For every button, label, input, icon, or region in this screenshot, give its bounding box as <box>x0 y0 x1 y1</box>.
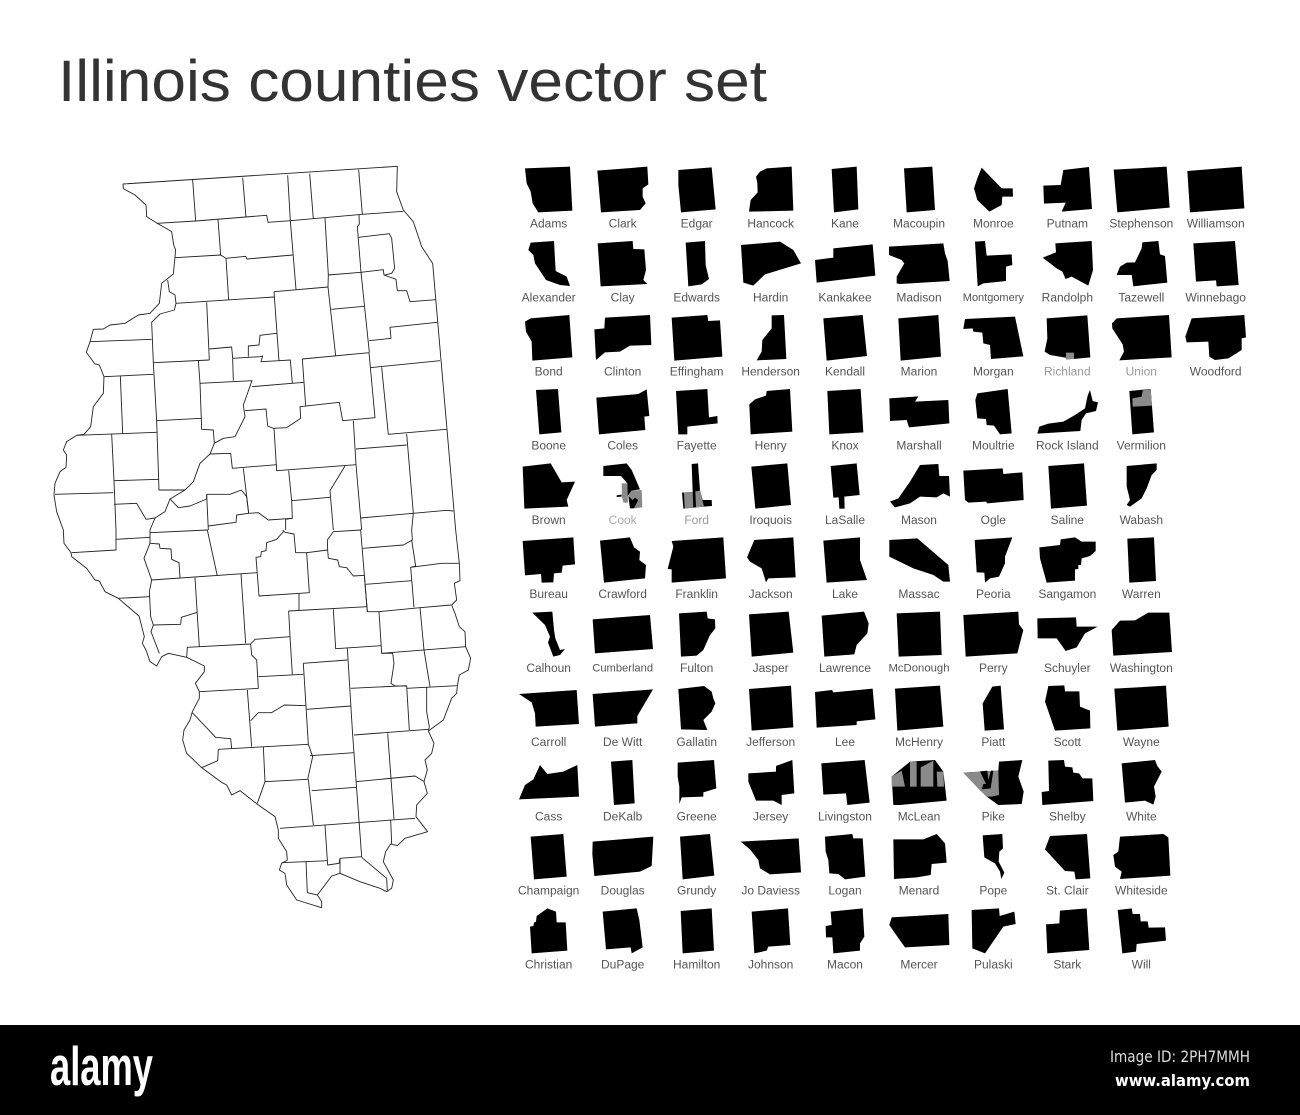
county: Hamilton: Hamilton <box>673 957 720 971</box>
county: Cook: Cook <box>609 513 638 527</box>
county: Mason <box>890 464 950 527</box>
county: McDonough <box>888 612 950 674</box>
county: Winnebago <box>1185 241 1246 305</box>
county: Saline: Saline <box>1051 513 1084 527</box>
county: Clark: Clark <box>609 217 638 231</box>
county: Warren: Warren <box>1122 587 1161 601</box>
county: Douglas: Douglas <box>601 883 645 897</box>
county: Edgar: Edgar <box>681 217 713 231</box>
county: Peoria <box>975 537 1012 601</box>
county: Richland <box>1044 315 1091 379</box>
county: Fulton <box>679 612 715 675</box>
county: Bond: Bond <box>535 365 563 379</box>
county: Marshall: Marshall <box>896 439 942 453</box>
county: Lee: Lee <box>835 735 855 749</box>
county: Moultrie <box>972 389 1015 453</box>
county: Union <box>1112 315 1172 379</box>
county: Iroquois <box>749 463 792 527</box>
county: Boone: Boone <box>531 439 566 453</box>
county: Mason: Mason <box>901 513 937 527</box>
county: Vermilion <box>1117 389 1166 453</box>
county: Hamilton <box>673 908 720 971</box>
county: Macon <box>826 908 864 971</box>
county: Ogle: Ogle <box>981 513 1006 527</box>
county: Livingston <box>818 760 872 823</box>
county: Champaign: Champaign <box>518 883 579 897</box>
county: Montgomery: Montgomery <box>963 292 1024 304</box>
county: LaSalle <box>825 463 865 527</box>
county: Jo Daviess <box>741 838 801 897</box>
county: Ford: Ford <box>684 513 709 527</box>
county: DuPage: DuPage <box>601 957 645 971</box>
county: Johnson <box>748 908 793 971</box>
county: DeKalb: DeKalb <box>603 809 643 823</box>
county: Pike: Pike <box>982 809 1005 823</box>
county: Monroe: Monroe <box>973 217 1014 231</box>
county: Macon: Macon <box>827 957 863 971</box>
county: Perry: Perry <box>979 661 1008 675</box>
county: Cumberland <box>592 615 653 674</box>
county: Grundy <box>677 834 716 897</box>
county: Montgomery <box>963 241 1024 304</box>
county: Piatt <box>981 686 1006 749</box>
county: Jackson <box>747 537 796 601</box>
county: Mercer: Mercer <box>900 957 938 971</box>
county: Shelby <box>1042 760 1093 823</box>
county: Pike <box>963 760 1024 823</box>
county: Gallatin: Gallatin <box>676 735 717 749</box>
county: Gallatin <box>676 686 717 749</box>
county: Mercer <box>889 914 949 971</box>
county: Franklin: Franklin <box>675 587 718 601</box>
county: Henderson: Henderson <box>741 365 800 379</box>
county: Jackson: Jackson <box>749 587 793 601</box>
county: Lake: Lake <box>832 587 858 601</box>
county: Clark <box>597 167 648 231</box>
county: Cass <box>519 765 579 823</box>
county: Boone <box>531 389 566 453</box>
county: Pope <box>979 834 1008 897</box>
county: Stephenson: Stephenson <box>1109 217 1173 231</box>
panel: county silhouettes grid <box>518 167 1246 971</box>
county: Fayette <box>676 389 718 453</box>
county: Edgar <box>678 167 716 231</box>
county: Madison <box>889 243 950 305</box>
county: Shelby: Shelby <box>1049 809 1086 823</box>
county: Coles <box>596 389 649 453</box>
county: Hancock <box>747 167 795 231</box>
county: Whiteside <box>1113 834 1170 897</box>
county: Menard <box>893 834 947 897</box>
county: McLean: McLean <box>898 809 940 823</box>
county: Woodford <box>1185 315 1246 379</box>
footer bar: alamy <box>0 1025 1300 1115</box>
county: Jersey: Jersey <box>753 809 788 823</box>
county: Stark: Stark <box>1053 957 1082 971</box>
county: Effingham: Effingham <box>670 365 724 379</box>
county: Randolph: Randolph <box>1042 291 1093 305</box>
county: Brown <box>523 463 575 527</box>
county: Coles: Coles <box>607 439 638 453</box>
county: St. Clair: St. Clair <box>1046 883 1089 897</box>
county: Johnson: Johnson <box>748 957 793 971</box>
county: Alexander: Alexander <box>522 291 576 305</box>
county: Washington: Washington <box>1110 661 1173 675</box>
county: Jo Daviess: Jo Daviess <box>741 883 800 897</box>
county: Hardin <box>741 242 801 305</box>
county: Macoupin <box>893 167 945 231</box>
county: Scott <box>1045 685 1090 749</box>
county: Sangamon: Sangamon <box>1038 587 1096 601</box>
county: Henry <box>749 389 792 453</box>
county: Fulton: Fulton <box>680 661 713 675</box>
county: Kankakee <box>815 244 875 305</box>
county: Cumberland: Cumberland <box>592 662 653 674</box>
county: Marion <box>898 315 941 379</box>
county: Adams: Adams <box>530 217 567 231</box>
county: Henderson <box>741 315 800 379</box>
county: Morgan <box>963 317 1023 379</box>
map: Illinois county outlines <box>54 166 471 908</box>
county: Jefferson <box>746 686 795 749</box>
county: Crawford: Crawford <box>598 587 647 601</box>
county: Kane: Kane <box>831 217 859 231</box>
county: Menard: Menard <box>899 883 939 897</box>
county: Whiteside: Whiteside <box>1115 883 1168 897</box>
county: Washington <box>1110 613 1173 675</box>
county: Clinton <box>594 315 651 379</box>
county: Champaign <box>518 834 579 897</box>
county: Franklin <box>668 537 726 601</box>
county: White: White <box>1126 809 1157 823</box>
county: Jasper <box>749 612 793 675</box>
county: Alexander <box>522 241 576 305</box>
county: McDonough: McDonough <box>888 662 950 674</box>
county: Pulaski: Pulaski <box>974 957 1013 971</box>
county: Christian <box>525 908 572 971</box>
county: Sangamon <box>1038 537 1096 601</box>
county: Clinton: Clinton <box>604 365 641 379</box>
county: Hardin: Hardin <box>753 291 788 305</box>
county: Iroquois: Iroquois <box>749 513 792 527</box>
county: Kane <box>831 167 859 231</box>
county: Crawford <box>598 537 647 601</box>
website: www.alamy.com <box>1115 1071 1250 1090</box>
county: Greene <box>677 760 717 823</box>
county: Union: Union <box>1126 365 1157 379</box>
county: Calhoun: Calhoun <box>526 661 571 675</box>
county: Cass: Cass <box>535 809 562 823</box>
county: Lake <box>823 537 867 601</box>
county: Stark <box>1046 908 1089 971</box>
county: Effingham <box>670 315 724 379</box>
county: De Witt: De Witt <box>603 735 643 749</box>
county: Livingston: Livingston <box>818 809 872 823</box>
county: Grundy: Grundy <box>677 883 716 897</box>
county: Williamson: Williamson <box>1187 217 1245 231</box>
county: Lawrence: Lawrence <box>819 661 871 675</box>
county: Putnam: Putnam <box>1047 217 1088 231</box>
county: Tazewell: Tazewell <box>1118 291 1164 305</box>
county: Wabash <box>1120 463 1163 527</box>
county: Jefferson: Jefferson <box>746 735 795 749</box>
county: Jersey <box>748 760 794 823</box>
county: Knox <box>827 389 863 453</box>
county: Christian: Christian <box>525 957 572 971</box>
county: Schuyler <box>1037 617 1098 675</box>
county: DuPage <box>601 908 645 971</box>
county: Bureau: Bureau <box>529 587 568 601</box>
county: Bureau <box>523 537 575 601</box>
county: DeKalb <box>603 760 643 823</box>
county: Monroe <box>973 168 1014 231</box>
county: Warren <box>1122 537 1161 601</box>
county: Kendall <box>823 315 867 379</box>
county: Peoria: Peoria <box>976 587 1011 601</box>
county: Schuyler: Schuyler <box>1044 661 1091 675</box>
county: Wabash: Wabash <box>1120 513 1163 527</box>
county: LaSalle: LaSalle <box>825 513 865 527</box>
county: Pope: Pope <box>979 883 1008 897</box>
county: Kendall: Kendall <box>825 365 865 379</box>
county: Lee <box>815 689 875 749</box>
county: Kankakee: Kankakee <box>818 291 872 305</box>
county: Wayne <box>1114 686 1169 749</box>
county: Rock Island <box>1036 390 1099 453</box>
county: Woodford: Woodford <box>1190 365 1242 379</box>
county: Wayne: Wayne <box>1123 735 1160 749</box>
county: Jasper: Jasper <box>753 661 789 675</box>
county: Edwards <box>673 241 720 305</box>
county: Winnebago: Winnebago <box>1185 291 1246 305</box>
county: Hancock: Hancock <box>747 217 795 231</box>
county: Knox: Knox <box>831 439 859 453</box>
county: McHenry <box>895 686 943 749</box>
county: Tazewell <box>1117 241 1167 305</box>
county: Stephenson <box>1109 167 1173 231</box>
county: Randolph <box>1042 241 1093 305</box>
county: Ogle <box>963 468 1024 527</box>
county: Williamson <box>1187 167 1245 231</box>
county: Adams <box>525 167 572 231</box>
county: Greene: Greene <box>677 809 717 823</box>
county: Massac <box>889 538 950 601</box>
county: McLean <box>892 760 947 823</box>
county: Clay: Clay <box>611 291 635 305</box>
county: Fayette: Fayette <box>677 439 717 453</box>
county: Clay <box>598 241 647 305</box>
county: Macoupin: Macoupin <box>893 217 945 231</box>
county: Douglas <box>592 837 653 897</box>
county: Marshall <box>889 396 949 453</box>
county: Carroll: Carroll <box>531 735 566 749</box>
county: Brown: Brown <box>532 513 566 527</box>
county: McHenry: McHenry <box>895 735 943 749</box>
county: Putnam <box>1043 167 1092 231</box>
county: Logan <box>825 834 865 897</box>
county: Ford <box>682 463 712 527</box>
county: Massac: Massac <box>898 587 940 601</box>
county: Cook <box>603 463 642 527</box>
county: Carroll <box>519 690 579 749</box>
county: Scott: Scott <box>1054 735 1082 749</box>
county: De Witt <box>593 689 653 749</box>
county: Calhoun <box>526 612 571 675</box>
county: Pulaski <box>972 908 1016 971</box>
county: Will: Will <box>1132 957 1151 971</box>
alamy logo: alamy <box>50 1035 153 1097</box>
county: St. Clair <box>1045 834 1090 897</box>
county: Perry <box>963 612 1023 675</box>
county: Henry: Henry <box>755 439 787 453</box>
county: Edwards: Edwards <box>673 291 720 305</box>
county: Richland: Richland <box>1044 365 1091 379</box>
county: Logan: Logan <box>828 883 862 897</box>
county: Piatt: Piatt <box>981 735 1006 749</box>
county: Lawrence <box>819 612 871 675</box>
county: Rock Island: Rock Island <box>1036 439 1099 453</box>
county: Will <box>1118 908 1166 971</box>
county: Moultrie: Moultrie <box>972 439 1015 453</box>
county: White <box>1122 760 1162 823</box>
county: Saline <box>1048 463 1087 527</box>
county: Bond <box>525 315 572 379</box>
county: Madison: Madison <box>896 291 942 305</box>
county: Vermilion: Vermilion <box>1117 439 1166 453</box>
title: Illinois counties vector set <box>58 49 767 114</box>
county: Marion: Marion <box>901 365 937 379</box>
county: Morgan: Morgan <box>973 365 1014 379</box>
image id: Image ID: 2PH7MMH <box>1110 1047 1250 1066</box>
